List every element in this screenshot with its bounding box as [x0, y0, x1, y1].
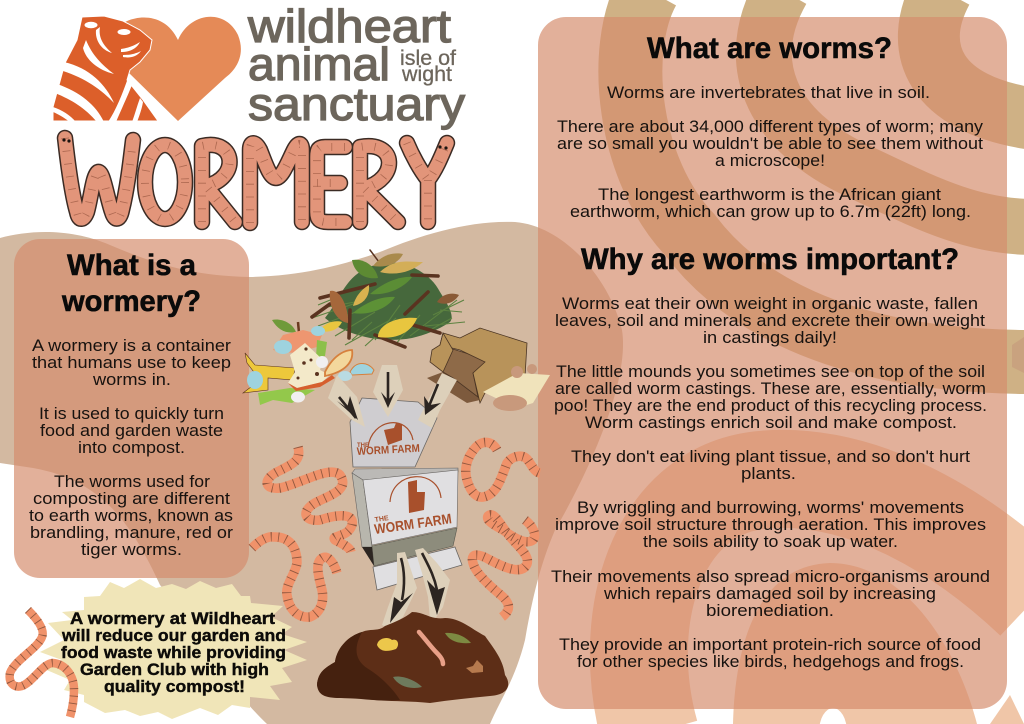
text block: wormery description: composting are different [33, 489, 230, 508]
text block: why worms are important: which repairs damaged soil by increasing [603, 584, 936, 603]
text block: why worms are important: Worm castings enrich soil and make compost. [585, 413, 957, 432]
text block: why worms are important: Their movements also spread micro-organisms around [551, 567, 990, 586]
text block: what are worms: are so small you wouldn't be able to see them without [557, 134, 983, 153]
text block: why worms are important: poo! They are the end product of this recycling process. [554, 396, 987, 415]
illustration: the worm farm: WORM FARM [357, 443, 420, 458]
text block: why worms are important: The little mounds you sometimes see on top of the soil [556, 362, 985, 381]
orange peels [325, 350, 352, 376]
text block: what are worms: There are about 34,000 different types of worm; many [557, 117, 984, 136]
text block: what are worms: Worms are invertebrates that live in soil. [607, 83, 930, 102]
callout: wormery at Wildheart: quality compost! [104, 677, 245, 696]
icon: heart [120, 17, 241, 121]
heading: what is a wormery: What is a [67, 249, 196, 282]
logo wordmark: isle of [400, 47, 456, 70]
title: WORMERY drawn from worms [62, 138, 448, 223]
callout: wormery at Wildheart: food waste while providing [61, 643, 286, 662]
logo wordmark [247, 0, 465, 130]
callout: wormery at Wildheart [40, 579, 307, 719]
text block: why worms are important: They don't eat living plant tissue, and so don't hurt [571, 447, 970, 466]
text block: why worms are important: bioremediation. [706, 601, 834, 620]
text block: why worms are important: plants. [741, 464, 796, 483]
text block: what are worms: earthworm, which can grow up to 6.7m (22ft) long. [570, 202, 971, 221]
illustration: the worm farm: WORM FARM [373, 510, 453, 537]
text block: why worms are important: Worms eat their own weight in organic waste, fallen [562, 294, 978, 313]
text block: why worms are important: leaves, soil and minerals and excrete their own weight [555, 311, 985, 330]
heading: what are worms: What are worms? [647, 32, 892, 65]
text block: wormery description: A wormery is a container [32, 336, 231, 355]
background worm bands bottom right [639, 479, 1024, 724]
text block: wormery description: tiger worms. [81, 540, 182, 559]
text block: wormery description [29, 336, 233, 559]
text block: why worms are important: in castings daily! [703, 328, 837, 347]
logo wordmark: wight [401, 63, 452, 86]
background worm bands top right [630, 0, 1024, 373]
panel: worm facts background [538, 17, 1007, 709]
illustration: the worm farm [350, 398, 462, 590]
text block: wormery description: brandling, manure, red or [30, 523, 233, 542]
callout: wormery at Wildheart: will reduce our garden and [61, 626, 286, 645]
text block: why worms are important: improve soil structure through aeration. This improves [555, 515, 986, 534]
callout: wormery at Wildheart: A wormery at Wildheart [70, 609, 275, 628]
callout: wormery at Wildheart: Garden Club with high [80, 660, 269, 679]
green peel [258, 388, 315, 405]
illustration: the worm farm: THE [357, 443, 369, 449]
illustration: cardboard box and paper [427, 328, 550, 411]
apple core [288, 343, 330, 388]
text block: wormery description: into compost. [78, 438, 185, 457]
text block: why worms are important: By wriggling and burrowing, worms' movements [577, 498, 964, 517]
logo wordmark: animal [248, 38, 390, 90]
logo wordmark: wildheart [247, 0, 451, 52]
text block: why worms are important: They provide an important protein-rich source of food [559, 635, 981, 654]
text: worm facts [551, 32, 990, 671]
text block: wormery description: worms in. [92, 370, 171, 389]
arrows into the wormery [328, 365, 457, 428]
text block: why worms are important [551, 294, 990, 671]
heading: what is a wormery [61, 249, 201, 318]
logo wordmark: sanctuary [248, 78, 465, 130]
text block: wormery description: to earth worms, known as [29, 506, 233, 525]
decorative worm beside callout [10, 610, 74, 717]
arrows out of the wormery [382, 548, 450, 628]
text block: what are worms [557, 83, 984, 221]
panel: what is a wormery [14, 239, 249, 578]
text block: what are worms: The longest earthworm is the African giant [598, 185, 941, 204]
text block: wormery description: The worms used for [54, 472, 210, 491]
banana peel [243, 353, 295, 393]
illustration: food scraps [243, 320, 374, 405]
text block: what are worms: a microscope! [715, 151, 825, 170]
text block: wormery description: that humans use to keep [32, 353, 231, 372]
text block: wormery description: food and garden waste [40, 421, 223, 440]
logo: tiger and heart [53, 0, 465, 130]
illustration: the worm farm: THE [374, 515, 389, 524]
icon: tiger [53, 16, 158, 122]
illustration: garden waste pile [300, 0, 465, 347]
text block: why worms are important: the soils ability to soak up water. [643, 532, 898, 551]
illustration: compost heap [317, 612, 508, 703]
decorative worms around the wormery [252, 442, 540, 617]
text block: why worms are important: are called worm castings. These are, essentially, worm [555, 379, 986, 398]
background soil blob [0, 222, 623, 724]
heading: why are worms important: Why are worms important? [581, 243, 959, 276]
text block: wormery description: It is used to quickly turn [39, 404, 224, 423]
heading: what is a wormery: wormery? [61, 285, 201, 318]
text block: why worms are important: for other species like birds, hedgehogs and frogs. [577, 652, 964, 671]
